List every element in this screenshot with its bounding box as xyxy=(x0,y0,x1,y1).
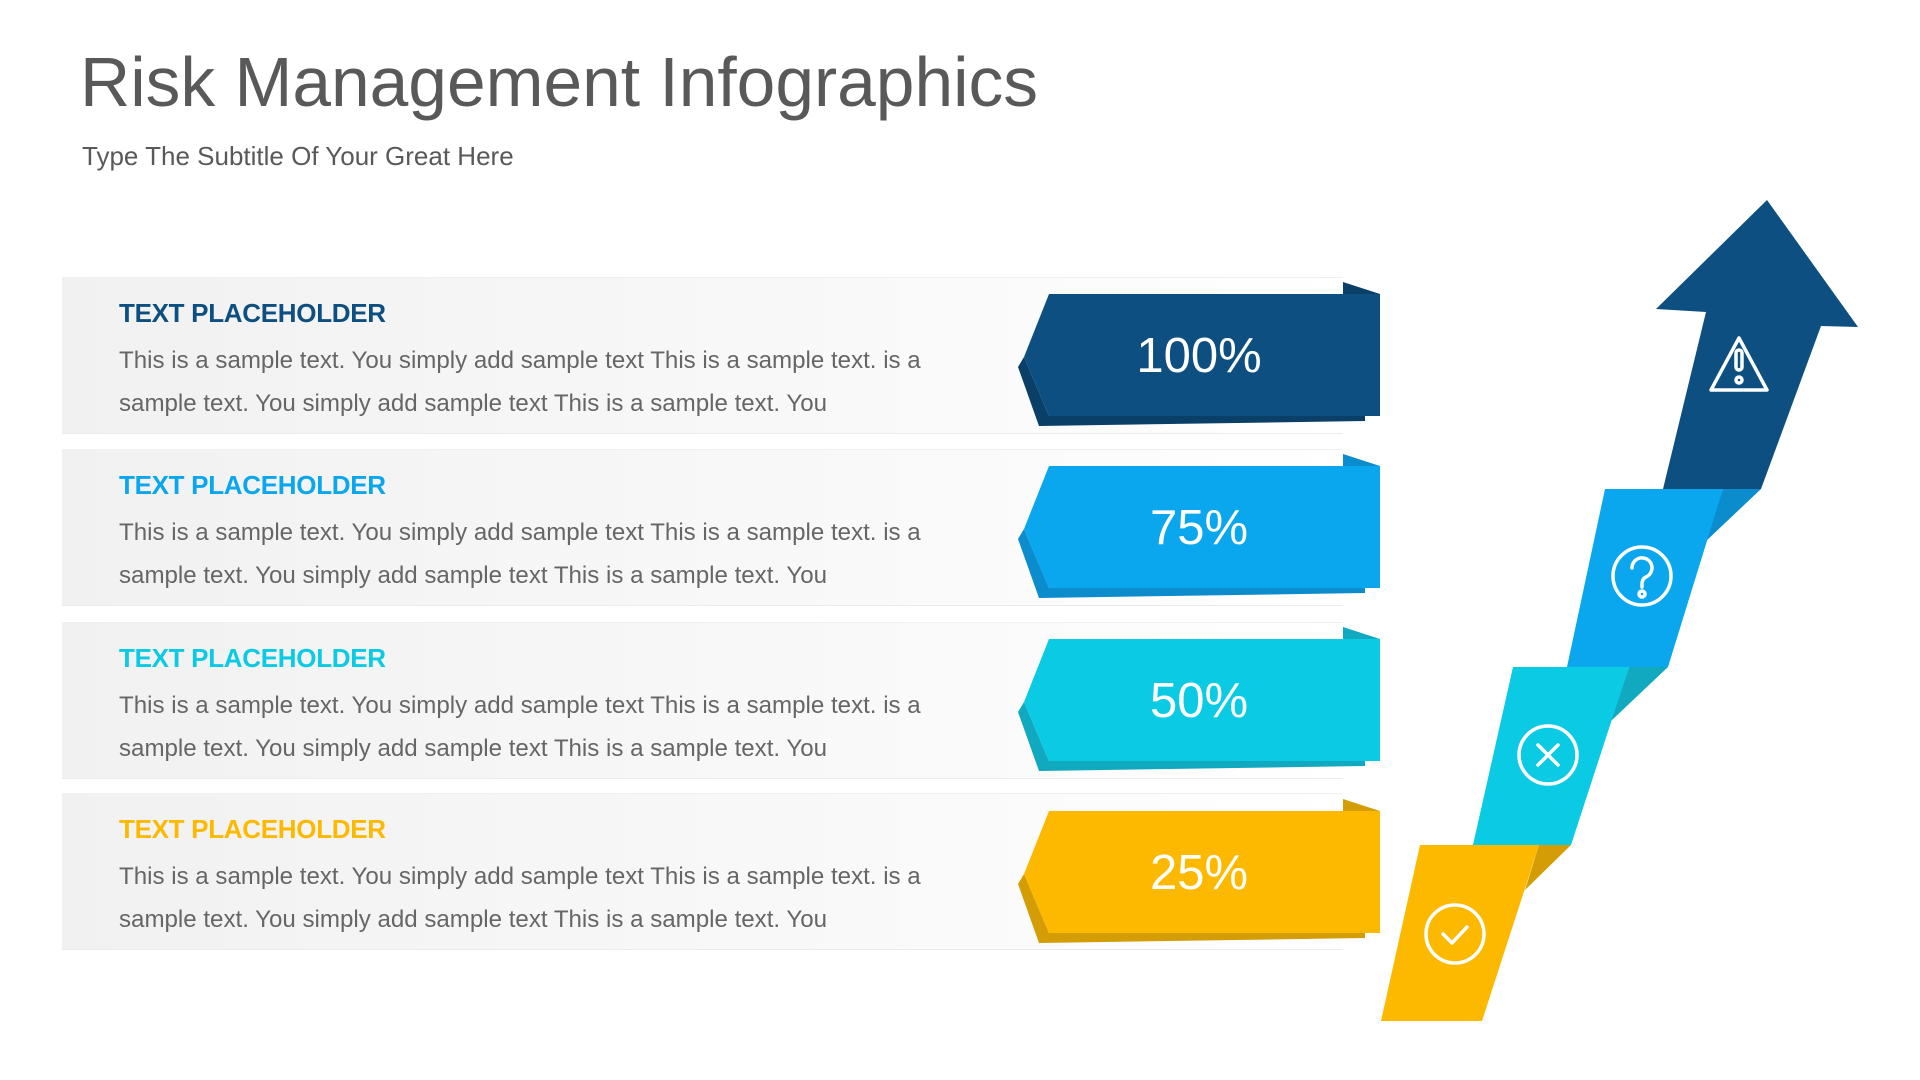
body 3: sample text. You simply add sample text This is a sample text. You xyxy=(119,735,827,762)
body 2: This is a sample text. You simply add sample text This is a sample text. is a xyxy=(119,519,921,546)
icon: x xyxy=(1519,726,1577,784)
heading 4: TEXT PLACEHOLDER xyxy=(119,814,386,844)
body 1 xyxy=(119,347,921,417)
body 4: This is a sample text. You simply add sample text This is a sample text. is a xyxy=(119,863,921,890)
heading 1: TEXT PLACEHOLDER xyxy=(119,298,386,328)
body 1: sample text. You simply add sample text This is a sample text. You xyxy=(119,390,827,417)
tag: 75%: 75% xyxy=(1150,501,1248,555)
panel: row 3 xyxy=(62,622,1343,779)
tag: 50%: 50% xyxy=(1150,674,1248,728)
icon: question xyxy=(1613,547,1671,605)
heading 2: TEXT PLACEHOLDER xyxy=(119,470,386,500)
body 2: sample text. You simply add sample text This is a sample text. You xyxy=(119,562,827,589)
body 4: sample text. You simply add sample text This is a sample text. You xyxy=(119,906,827,933)
tag: 50% xyxy=(1018,627,1380,771)
body 3 xyxy=(119,692,921,762)
tag: 100%: 100% xyxy=(1136,329,1262,383)
heading 3: TEXT PLACEHOLDER xyxy=(119,643,386,673)
body 1: This is a sample text. You simply add sample text This is a sample text. is a xyxy=(119,347,921,374)
arrow xyxy=(1381,200,1858,1021)
tag: 75% xyxy=(1018,454,1380,598)
icon: check xyxy=(1426,905,1484,963)
panel: row 4 xyxy=(62,793,1343,950)
body 3: This is a sample text. You simply add sample text This is a sample text. is a xyxy=(119,692,921,719)
panel: row 2 xyxy=(62,449,1343,606)
tag: 25%: 25% xyxy=(1150,846,1248,900)
tag: 100% xyxy=(1018,282,1380,426)
body 2 xyxy=(119,519,921,589)
subtitle: Type The Subtitle Of Your Great Here xyxy=(82,141,514,171)
body 4 xyxy=(119,863,921,933)
title: Risk Management Infographics xyxy=(80,43,1038,121)
panel: row 1 xyxy=(62,277,1343,434)
tag: 25% xyxy=(1018,799,1380,943)
icon: warning xyxy=(1711,338,1767,390)
